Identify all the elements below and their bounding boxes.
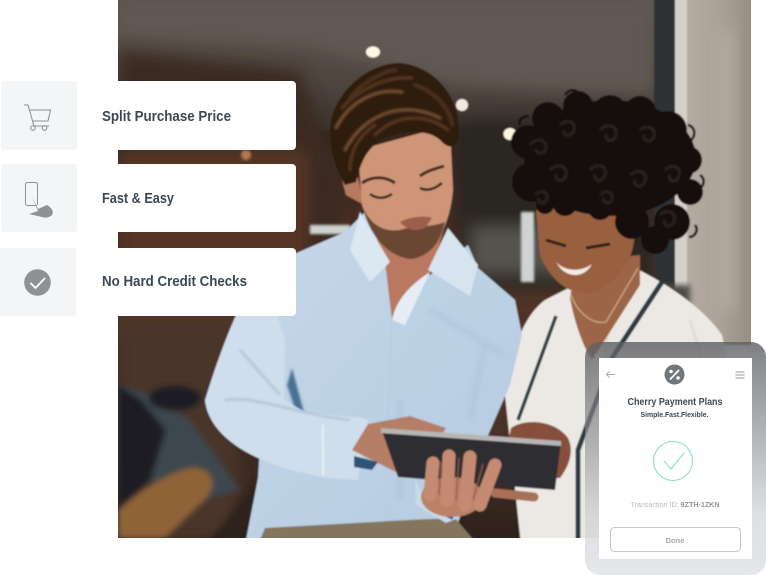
tablet and hands — [352, 416, 561, 523]
label card — [118, 248, 296, 316]
face — [536, 201, 634, 293]
hair — [330, 63, 459, 185]
palm — [421, 477, 483, 517]
beard — [362, 205, 445, 259]
label card — [118, 81, 296, 150]
icon tile: cart — [1, 81, 77, 150]
shirt torso — [245, 212, 522, 545]
blouse straps — [518, 316, 556, 420]
white left margin over photo edge — [0, 0, 118, 575]
feature row: no hard credit checks — [0, 248, 296, 316]
back arrow icon — [606, 372, 615, 378]
man — [205, 63, 522, 545]
phone screen — [599, 358, 752, 559]
curly hair — [511, 91, 703, 254]
collar — [350, 212, 390, 282]
device frame: translucent phone — [585, 342, 766, 575]
feature row: fast and easy — [1, 164, 296, 232]
label: No Hard Credit Checks — [102, 274, 247, 290]
screen title: Cherry Payment Plans — [628, 397, 723, 408]
logo: percent badge — [664, 364, 684, 384]
icon tile: check badge — [0, 248, 76, 316]
transaction id: Transaction ID: 9ZTH-1ZKN — [630, 500, 720, 509]
ceiling lights — [241, 46, 516, 160]
man's left hand on tablet — [352, 416, 446, 473]
face — [358, 131, 454, 231]
thumb — [495, 493, 534, 497]
ear — [341, 176, 362, 204]
woman's hand — [500, 422, 571, 480]
screen subtitle: Simple.Fast.Flexible. — [640, 410, 708, 419]
neck and chest — [570, 255, 640, 360]
tablet — [381, 428, 561, 490]
shirt shadow under arm — [287, 368, 304, 412]
neck — [372, 225, 445, 320]
woman — [505, 90, 740, 545]
done button — [610, 528, 740, 552]
menu icon — [736, 372, 744, 378]
feature row: split purchase price — [1, 81, 296, 150]
stray curls — [520, 90, 704, 237]
hair strands — [336, 70, 452, 170]
sleeve — [204, 316, 368, 480]
blouse — [505, 268, 740, 545]
right cuff — [415, 480, 458, 523]
label: Fast & Easy — [102, 191, 174, 207]
button placket — [385, 320, 392, 520]
done button: Done — [666, 536, 684, 545]
hair curl texture — [530, 121, 680, 226]
icon tile: phone and hand — [1, 164, 77, 232]
trousers — [260, 518, 474, 538]
fingers — [430, 456, 495, 505]
success check icon — [654, 442, 692, 480]
blurred objects bottom left — [118, 385, 265, 545]
eyes and brows — [362, 166, 444, 183]
label: Split Purchase Price — [102, 109, 231, 125]
label card — [118, 164, 296, 232]
necklace — [571, 268, 638, 322]
